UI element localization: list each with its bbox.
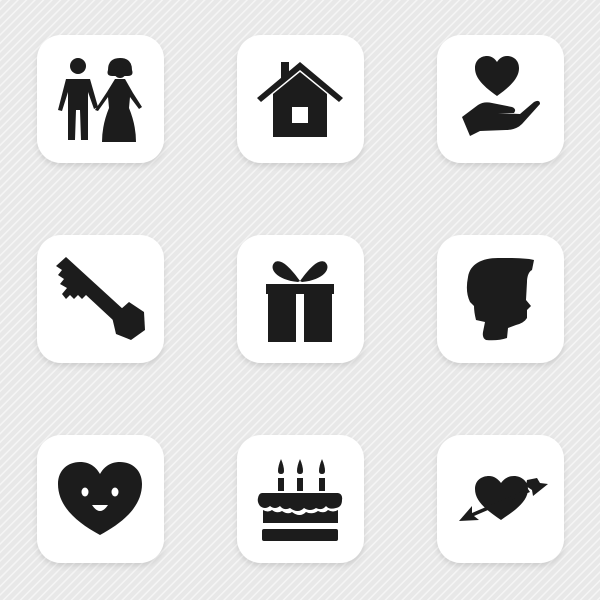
tile grid xyxy=(37,35,564,563)
icon: couple xyxy=(58,58,142,142)
icon: heart with arrow xyxy=(459,476,548,521)
icon: house xyxy=(257,62,343,137)
icon: hand with heart xyxy=(462,56,540,136)
icon: key xyxy=(56,257,145,340)
icon: birthday cake xyxy=(258,459,342,541)
icon: smiling heart xyxy=(58,462,142,535)
icon: gift xyxy=(266,261,334,342)
icon: boy head xyxy=(467,258,534,340)
